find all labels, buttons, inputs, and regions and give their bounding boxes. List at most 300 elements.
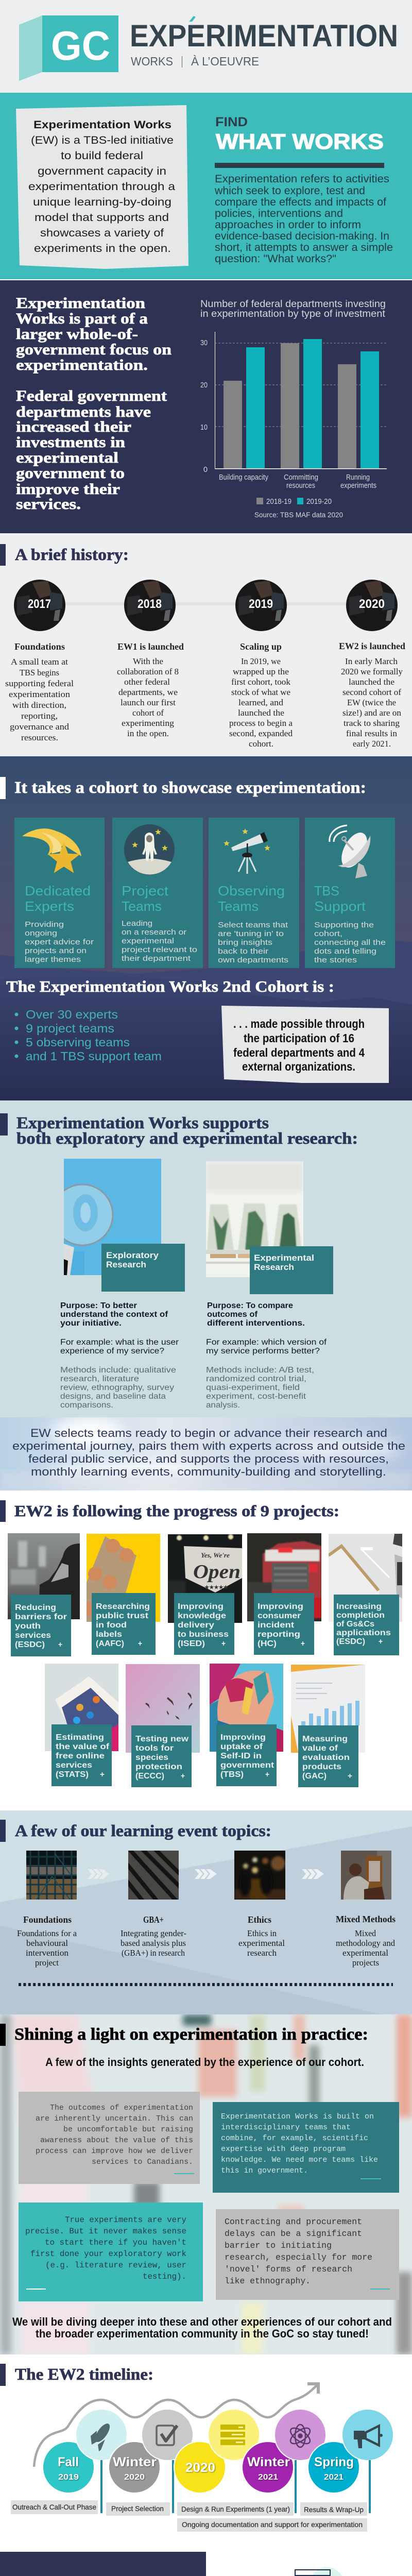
project: evaluation products: products: [302, 1762, 341, 1771]
milestone: 2017 foundations: resources.: [21, 733, 58, 742]
banner: EW process on sky background: EW selects teams ready to begin or advance their research and: [30, 1427, 387, 1439]
quote box: interdisciplinary teams: Experimentation Works is built on: [221, 2112, 374, 2121]
bar chart: federal departments investing: Committing: [284, 473, 318, 482]
bar chart: federal departments investing: in experimentation by type of investment: [200, 309, 386, 319]
heading: it takes a cohort: It takes a cohort to showcase experimentation:: [14, 778, 366, 796]
project: food labels: [83, 1534, 160, 1655]
heading: find what works: WHAT WORKS: [216, 129, 384, 154]
topic: GBA+: GBA+: [143, 1914, 164, 1925]
topic: mixed methods: experimental: [342, 1948, 388, 1958]
project: evaluation products: value of: [302, 1744, 338, 1753]
milestone: 2017 foundations: experimentation: [9, 689, 71, 699]
heading: EW2 timeline: The EW2 timeline:: [15, 2365, 153, 2383]
project: food labels: Researching: [96, 1602, 150, 1611]
column: experimental research: my service performs better?: [206, 1347, 320, 1355]
project: free online services: Estimating: [56, 1733, 104, 1742]
topic: GBA+: [113, 1843, 195, 1958]
column: experimental research: experiment, cost-benefit: [206, 1392, 306, 1401]
quote box: contracting delays: Contracting and procurement: [225, 2217, 362, 2227]
topic: mixed methods: projects: [352, 1958, 379, 1968]
topic: mixed methods: Mixed Methods: [336, 1914, 396, 1924]
subtitle: À L’OEUVRE: [191, 55, 259, 68]
milestone: 2019 scaling up: stock of what we: [231, 687, 290, 697]
text: whole of government statement: larger whole-of-: [16, 326, 138, 343]
topic: mixed methods: [336, 1851, 396, 1968]
project: knowledge delivery: (ISED): [178, 1639, 205, 1648]
card: TBS support: dots and telling: [314, 947, 376, 956]
quote box: interdisciplinary teams: interdisciplinary teams that: [221, 2123, 351, 2132]
milestone: 2019 scaling up: [229, 580, 293, 749]
paper card: intro: experiments in the open.: [34, 243, 171, 255]
milestone: 2018 EW1 launched: departments, we: [118, 687, 178, 697]
card: dedicated experts: Dedicated: [25, 883, 91, 899]
text: whole of government statement: experimental: [16, 449, 118, 466]
project: youth services: [8, 1533, 80, 1656]
topic: ethics: Ethics: [248, 1914, 271, 1925]
project: knowledge delivery: to business: [178, 1630, 229, 1639]
card: dedicated experts: [14, 818, 105, 968]
text: whole of government statement: increased their: [16, 418, 131, 435]
project: self-ID uptake: +: [265, 1770, 269, 1779]
milestone: 2019 scaling up: 2019: [249, 597, 273, 611]
heading: shining a light: Shining a light on experimentation in practice:: [14, 2025, 368, 2044]
text: whole of government statement: Federal government: [16, 387, 167, 404]
card: TBS support: Support: [314, 899, 366, 914]
project: consumer incident reporting: (HC): [258, 1639, 277, 1648]
milestone: fall 2019: Fall: [58, 2455, 79, 2469]
project: consumer incident reporting: +: [301, 1639, 305, 1648]
heading: 2nd cohort: The Experimentation Works 2nd Cohort is :: [6, 977, 334, 995]
card: project teams: their department: [122, 954, 191, 963]
card: TBS support: connecting all the: [314, 938, 386, 947]
milestone: winter 2020: [108, 2409, 194, 2513]
panel: it takes a cohort: [0, 756, 412, 1100]
milestone: 2020 EW2 launched: 2020 we formally: [341, 667, 403, 676]
paper card: participation: the participation of 16: [244, 1031, 354, 1045]
heading: a brief history: A brief history:: [15, 545, 129, 564]
text: whole of government statement: government to: [16, 465, 125, 482]
card: observing teams: are 'tuning in' to: [218, 929, 284, 938]
project: knowledge delivery: [168, 1534, 242, 1655]
text: whole of government statement: improve their: [16, 481, 120, 498]
column: exploratory research: research, literature: [60, 1375, 139, 1383]
milestone: fall 2019: 2019: [58, 2473, 79, 2482]
paper card: participation: federal departments and 4: [233, 1046, 365, 1059]
paper card: intro: government capacity in: [38, 165, 166, 177]
milestone: 2020 EW2 launched: track to sharing: [344, 718, 400, 728]
milestone: spring 2021: Spring: [314, 2455, 354, 2469]
bar chart: federal departments investing: 2019-20: [306, 497, 332, 506]
project: species protection: species: [135, 1753, 168, 1762]
milestone: 2018 EW1 launched: [117, 580, 184, 738]
quote box: interdisciplinary teams: [213, 2102, 399, 2193]
project: Gs&Cs applications: [329, 1534, 402, 1655]
arrow: chevrons 3: [302, 1869, 324, 1879]
project: self-ID uptake: Self-ID in: [220, 1752, 262, 1760]
column: experimental research: Research: [254, 1262, 294, 1272]
bar chart: federal departments investing: 2018-19: [266, 497, 291, 506]
project: food labels: in food: [96, 1621, 127, 1630]
subtitle: WORKS: [131, 55, 173, 68]
icon: astronaut: [124, 824, 175, 875]
quote box: contracting delays: like ethnography.: [225, 2276, 311, 2286]
column: experimental research: outcomes of: [207, 1310, 258, 1319]
topic: ethics: [234, 1851, 285, 1958]
phase labels: Outreach & Call-Out Phase: [12, 2503, 96, 2511]
project: species protection: Testing new: [135, 1735, 189, 1743]
card: TBS support: [305, 818, 395, 968]
column: exploratory research: For example: what is the user: [60, 1338, 179, 1347]
banner: EW process on sky background: [0, 1417, 412, 1490]
arrow: rising path: [34, 2384, 318, 2467]
list: cohort composition: Over 30 experts: [26, 1008, 118, 1021]
milestone: winter 2020: 2020: [124, 2473, 145, 2482]
bar chart: federal departments investing: 30: [200, 338, 208, 347]
text: whole of government statement: departments have: [16, 403, 151, 420]
text: whole of government statement: [16, 295, 171, 513]
card: observing teams: Teams: [218, 899, 259, 914]
topic: foundations: project: [35, 1958, 59, 1968]
project: Gs&Cs applications: completion: [336, 1611, 385, 1620]
bar chart: federal departments investing: Building capacity: [219, 473, 268, 482]
card: observing teams: back to their: [218, 947, 268, 956]
quote box: contracting delays: barrier to initiating: [225, 2241, 332, 2250]
text: definition: which seek to explore, test and: [214, 185, 365, 197]
milestone: winter 2021: Winter: [247, 2455, 290, 2469]
column: exploratory research: review, ethnography, survey: [60, 1383, 174, 1392]
link: GCWiki: [293, 2567, 344, 2576]
project: consumer incident reporting: Improving: [258, 1602, 303, 1611]
column: exploratory research: [52, 1159, 185, 1410]
milestone: 2017 foundations: supporting federal: [5, 679, 74, 688]
text: whole of government statement: Works is part of a: [16, 310, 148, 327]
topic: mixed methods: Mixed: [355, 1928, 376, 1938]
project: free online services: [45, 1664, 118, 1786]
card: project teams: Teams: [122, 899, 162, 914]
icon: megaphone: [354, 2424, 383, 2448]
quote box: uncertainty: services to Canadians.: [92, 2158, 193, 2166]
project: species protection: tools for: [135, 1744, 174, 1753]
phase labels: Ongoing documentation and support for experimentation: [182, 2520, 363, 2529]
milestone: 2017 foundations: governance and: [10, 722, 70, 732]
card: TBS support: Supporting the: [314, 921, 374, 929]
project: species protection: (ECCC): [135, 1772, 164, 1781]
card: observing teams: own departments: [218, 956, 288, 964]
phase labels: Results & Wrap-Up: [304, 2505, 364, 2514]
text: definition: approaches in order to inform: [215, 219, 361, 231]
closing statement: [12, 2315, 392, 2340]
column: experimental research: different interventions.: [207, 1319, 305, 1328]
milestone: fall 2019: [43, 2409, 128, 2513]
column: experimental research: randomized control trial,: [206, 1375, 306, 1383]
card: dedicated experts: ongoing: [25, 929, 57, 938]
column: experimental research: analysis.: [206, 1401, 240, 1410]
milestone: 2017 foundations: TBS begins: [20, 668, 59, 677]
milestone: 2020 EW2 launched: second cohort of: [342, 687, 401, 697]
closing statement: the broader experimentation community in the GoC so stay tuned!: [36, 2327, 369, 2340]
quote box: true experiments: True experiments are very: [65, 2215, 186, 2225]
card: TBS support: the stories: [314, 956, 357, 964]
card: observing teams: Observing: [218, 883, 285, 899]
topic: ethics: research: [247, 1948, 277, 1958]
milestone: 2019 scaling up: wrapped up the: [233, 667, 289, 676]
topic: ethics: Ethics in: [247, 1928, 277, 1938]
icon: satellite dish: [330, 825, 372, 878]
quote box: true experiments: (e.g. literature review, user: [45, 2261, 186, 2270]
milestone: 2020 EW2 launched: launched the: [349, 677, 394, 687]
card: dedicated experts: Providing: [25, 920, 64, 929]
project: free online services: +: [100, 1770, 105, 1779]
paper card: intro: model that supports and: [35, 212, 169, 224]
milestone: 2020 EW2 launched: 2020: [359, 597, 385, 611]
milestone: 2017 foundations: A small team at: [11, 657, 68, 667]
column: exploratory research: your initiative.: [60, 1319, 122, 1328]
milestone: winter 2021: 2021: [258, 2473, 278, 2482]
card: project teams: project relevant to: [122, 945, 197, 954]
quote box: true experiments: to start there if you haven't: [45, 2238, 186, 2247]
card: project teams: Project: [122, 883, 169, 899]
milestone: 2018 EW1 launched: launch our first: [121, 698, 176, 707]
project: consumer incident reporting: consumer: [258, 1612, 301, 1620]
panel: whole of government: [0, 280, 412, 533]
milestone: 2018 EW1 launched: 2018: [138, 597, 162, 611]
topic: ethics: experimental: [238, 1938, 285, 1948]
project: knowledge delivery: Open: [193, 1561, 241, 1583]
project: food labels: public trust: [96, 1612, 149, 1620]
phase labels: Project Selection: [111, 2504, 164, 2513]
milestone: spring 2021: 2021: [324, 2473, 344, 2482]
project: species protection: +: [181, 1772, 185, 1781]
paper card: intro: unique learning-by-doing: [33, 196, 171, 208]
milestone: 2018 EW1 launched: cohort of: [132, 708, 164, 718]
project: food labels: +: [138, 1639, 142, 1648]
milestone: 2020 EW2 launched: [339, 580, 405, 749]
banner: EW process on sky background: federal public service, and supports the process with resources,: [28, 1452, 389, 1465]
topic: foundations: Foundations for a: [17, 1928, 77, 1938]
quote box: contracting delays: [216, 2209, 399, 2300]
text: whole of government statement: investments in: [16, 434, 125, 451]
quote box: interdisciplinary teams: combine, for example, scientific: [221, 2134, 368, 2143]
card: project teams: [112, 818, 203, 968]
panel: shining a light on experimentation: [0, 2014, 412, 2354]
project: food labels: labels: [96, 1630, 122, 1639]
milestone: 2018 EW1 launched: EW1 is launched: [117, 641, 184, 652]
quote box: interdisciplinary teams: knowledge. We need more teams like: [221, 2156, 378, 2164]
milestone: 2019 scaling up: process to begin a: [229, 718, 293, 728]
project: youth services: +: [58, 1640, 62, 1649]
project: knowledge delivery: delivery: [178, 1621, 214, 1630]
quote box: contracting delays: delays can be a significant: [225, 2229, 362, 2239]
column: exploratory research: comparisons.: [60, 1401, 113, 1410]
column: experimental research: Experimental: [254, 1253, 314, 1263]
panel: nine projects: [0, 1490, 412, 1810]
quote box: true experiments: precise. But it never makes sense: [25, 2227, 186, 2236]
icon: server stack: [220, 2425, 245, 2445]
bar chart: federal departments investing: Running: [346, 473, 370, 482]
milestone: 2020 EW2 launched: early 2021.: [353, 739, 391, 749]
project: knowledge delivery: Yes, We're: [201, 1551, 230, 1559]
project: youth services: services: [15, 1631, 51, 1640]
text: whole of government statement: government focus on: [16, 341, 171, 358]
column: experimental research: quasi-experiment, field: [206, 1383, 300, 1392]
project: self-ID uptake: (TBS): [220, 1770, 244, 1779]
project: Gs&Cs applications: +: [379, 1637, 383, 1646]
text: definition: [214, 173, 393, 265]
card: TBS support: cohort,: [314, 929, 342, 938]
panel: exploratory and experimental research: [0, 1100, 412, 1417]
card: dedicated experts: expert advice for: [25, 938, 94, 946]
project: knowledge delivery: ★★★★★: [204, 1585, 228, 1590]
card: observing teams: [209, 818, 299, 968]
heading: find what works: FIND: [215, 115, 248, 129]
paper card: intro: (EW) is a TBS-led initiative: [31, 134, 174, 146]
quote box: uncertainty: [19, 2092, 200, 2184]
paper card: intro: [16, 105, 188, 269]
paper card: intro: to build federal: [61, 150, 143, 162]
project: self-ID uptake: [210, 1664, 283, 1786]
column: exploratory research: experience of my service?: [60, 1347, 164, 1355]
project: free online services: free online: [56, 1752, 105, 1760]
card: TBS support: TBS: [314, 883, 339, 899]
bar chart: federal departments investing: 10: [200, 423, 208, 432]
paper card: participation: external organizations.: [242, 1060, 355, 1073]
quote box: uncertainty: awareness about the value of this: [40, 2136, 193, 2145]
project: Gs&Cs applications: of Gs&Cs: [336, 1620, 374, 1629]
card: dedicated experts: larger themes: [25, 955, 81, 964]
paper card: intro: Experimentation Works: [33, 119, 171, 131]
project: evaluation products: [291, 1665, 365, 1787]
panel: for more information: [0, 2552, 411, 2576]
panel: a brief history: [0, 533, 412, 756]
subheading: insights: A few of the insights generated by the experience of our cohort.: [45, 2056, 364, 2069]
panel: find what works: [0, 93, 412, 279]
subtitle: [131, 55, 259, 68]
project: evaluation products: +: [348, 1772, 352, 1781]
column: experimental research: For example: which version of: [206, 1338, 327, 1347]
card: observing teams: Select teams that: [218, 921, 288, 929]
milestone: 2018 EW1 launched: other federal: [124, 677, 170, 687]
logo: GC box: [19, 15, 118, 81]
project: self-ID uptake: government: [220, 1761, 274, 1770]
milestone: 2019 scaling up: cohort.: [249, 739, 273, 749]
text: definition: question: "What works?": [215, 253, 336, 265]
quote box: contracting delays: 'novel' forms of research: [225, 2264, 352, 2274]
milestone: 2020 EW2 launched: In early March: [345, 656, 398, 666]
paper card: intro: experimentation through a: [28, 181, 175, 193]
column: exploratory research: Exploratory: [106, 1250, 159, 1260]
milestone: 2019 scaling up: In 2019, we: [241, 656, 281, 666]
project: self-ID uptake: Improving: [220, 1733, 266, 1742]
paper card: participation: . . . made possible through: [233, 1017, 365, 1030]
quote box: interdisciplinary teams: expertise with deep program: [221, 2145, 346, 2154]
milestone: 2019 scaling up: launched the: [238, 708, 284, 718]
milestone: 2020 EW2 launched: size!) and are on: [342, 708, 401, 718]
project: free online services: services: [56, 1761, 92, 1770]
quote box: true experiments: testing).: [143, 2272, 186, 2281]
heading: research types: both exploratory and experimental research:: [16, 1129, 358, 1147]
list: cohort composition: 9 project teams: [26, 1022, 114, 1035]
milestone: 2019 scaling up: second, expanded: [229, 728, 293, 738]
quote box: contracting delays: research, especially for more: [225, 2252, 372, 2262]
project: youth services: youth: [15, 1622, 41, 1631]
icon: shooting star: [22, 828, 81, 873]
topic: foundations: Foundations: [23, 1914, 72, 1925]
icon: rocket: [91, 2421, 112, 2451]
heading: find what works: [215, 115, 384, 168]
quote box: uncertainty: process can improve how we deliver: [36, 2147, 193, 2156]
topic: foundations: behavioural: [26, 1938, 68, 1948]
bar chart: federal departments investing: 20: [200, 381, 208, 389]
topic: GBA+: Integrating gender-: [121, 1928, 186, 1938]
milestone: 2020: [174, 2409, 260, 2494]
quote box: interdisciplinary teams: this in government.: [221, 2166, 308, 2175]
project: knowledge delivery: Improving: [178, 1602, 224, 1611]
card: dedicated experts: Experts: [25, 899, 74, 914]
project: free online services: (STATS): [56, 1770, 89, 1779]
text: definition: compare the effects and impacts of: [215, 196, 386, 208]
topic: foundations: intervention: [26, 1948, 68, 1958]
milestone: 2020: 2020: [185, 2461, 215, 2475]
text: definition: policies, interventions and: [215, 208, 343, 219]
topic: GBA+: (GBA+) in research: [122, 1948, 185, 1958]
milestone: winter 2021: [242, 2409, 327, 2513]
project: knowledge delivery: +: [221, 1639, 226, 1648]
quote box: true experiments: [19, 2202, 203, 2301]
heading: nine projects: EW2 is following the progress of 9 projects:: [14, 1502, 339, 1520]
column: exploratory research: understand the context of: [60, 1310, 168, 1319]
column: experimental research: [206, 1161, 333, 1410]
phase labels: [11, 2500, 367, 2532]
text: whole of government statement: Experimentation: [16, 295, 145, 312]
project: consumer incident reporting: [247, 1533, 321, 1655]
heading: learning events: A few of our learning event topics:: [15, 1821, 271, 1840]
column: experimental research: Methods include: A/B test,: [206, 1366, 314, 1375]
project: consumer incident reporting: incident: [258, 1621, 295, 1630]
column: exploratory research: Methods include: qualitative: [60, 1366, 176, 1375]
project: evaluation products: evaluation: [302, 1753, 350, 1762]
quote box: uncertainty: are inherently uncertain. This can: [36, 2114, 193, 2123]
milestone: 2019 scaling up: learned, and: [238, 698, 284, 707]
phase labels: Design & Run Experiments (1 year): [181, 2505, 290, 2513]
column: exploratory research: designs, and baseline data: [60, 1392, 166, 1401]
text: whole of government statement: services.: [16, 496, 81, 513]
logo: GC box: GC: [51, 23, 110, 69]
project: knowledge delivery: knowledge: [178, 1612, 226, 1620]
header banner: [0, 0, 412, 93]
heading: research types: Experimentation Works supports: [16, 1113, 269, 1132]
image: magnifying glass: [64, 1159, 161, 1275]
project: species protection: [126, 1664, 200, 1787]
milestone: 2020 EW2 launched: final results in: [346, 728, 398, 738]
banner: EW process on sky background: monthly learning events, community-building and storytelling.: [31, 1465, 386, 1478]
project: Gs&Cs applications: Increasing: [336, 1602, 382, 1611]
milestone: 2017 foundations: Foundations: [14, 641, 65, 652]
list: cohort composition: [14, 1008, 162, 1063]
paper card: participation: [221, 1006, 389, 1083]
milestone: winter 2020: Winter: [113, 2455, 157, 2469]
arrow: chevrons 2: [195, 1869, 217, 1879]
quote box: uncertainty: The outcomes of experimentation: [50, 2104, 193, 2112]
project: Gs&Cs applications: applications: [336, 1629, 391, 1637]
text: definition: evidence-based decision-making. In: [215, 230, 389, 242]
milestone: 2018 EW1 launched: With the: [133, 656, 163, 666]
heading: research types: [0, 1113, 358, 1147]
quote box: true experiments: first done your exploratory work: [30, 2249, 186, 2259]
topic: mixed methods: methodology and: [336, 1938, 395, 1948]
milestone: 2017 foundations: reporting,: [21, 711, 58, 721]
list: cohort composition: and 1 TBS support team: [26, 1049, 162, 1063]
project: evaluation products: Measuring: [302, 1735, 348, 1743]
